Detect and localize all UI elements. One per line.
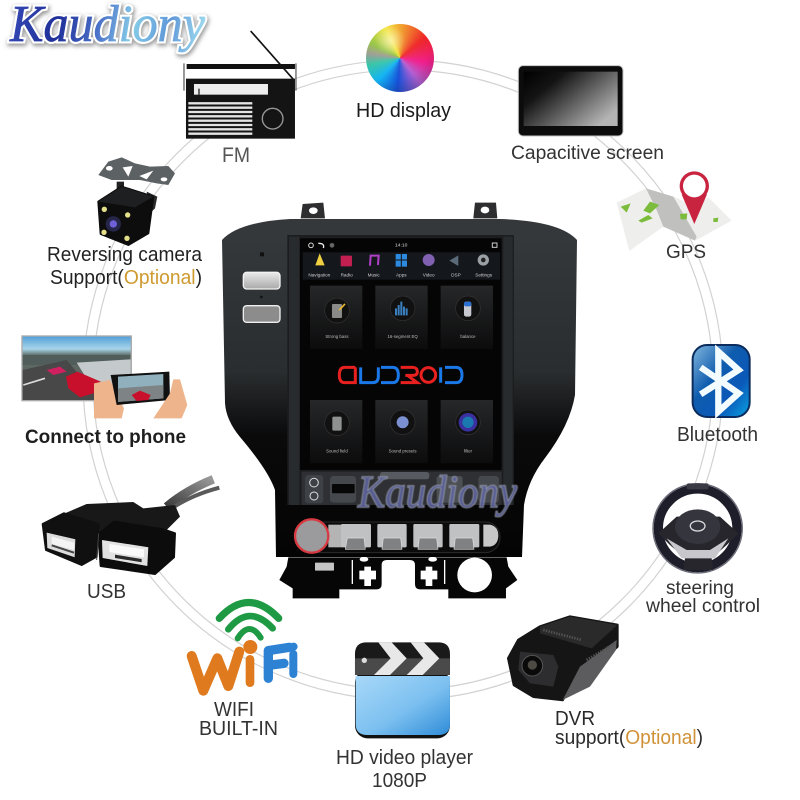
icon: GPS map and pin — [617, 171, 732, 251]
icon: connect to phone — [22, 336, 187, 418]
label: steering wheel control: steering — [666, 578, 734, 599]
app labels: Apps — [396, 272, 407, 277]
icon: reversing camera — [98, 157, 175, 245]
air vent buttons — [243, 252, 280, 322]
button strip with hazard button — [295, 519, 500, 553]
mounting tabs — [301, 203, 497, 218]
screen and controls — [243, 235, 514, 505]
label: DVR support(Optional): DVR — [555, 708, 595, 730]
device body — [222, 219, 577, 557]
label: Capacitive screen: Capacitive screen — [511, 143, 664, 164]
app labels: Settings — [475, 272, 493, 277]
cards bottom: Sound field — [326, 449, 348, 454]
status bar — [309, 242, 497, 248]
cards top: 16-segment EQ — [387, 334, 418, 339]
icon: WiFi logo — [192, 602, 298, 691]
ANDROID wordmark — [339, 367, 462, 383]
cards bottom — [310, 400, 493, 463]
label: HD video player 1080P: HD video player — [336, 747, 473, 769]
app labels: Radio — [341, 272, 353, 277]
cards top: Strong bass — [325, 334, 349, 339]
icon: FM radio — [184, 31, 296, 139]
label: DVR support(Optional) — [555, 708, 703, 749]
cards top — [310, 286, 493, 349]
lower climate panel — [302, 472, 502, 505]
label: GPS: GPS — [666, 242, 706, 263]
icon: USB cable — [43, 479, 219, 574]
label: HD display: HD display — [356, 100, 451, 122]
label: Bluetooth: Bluetooth — [677, 424, 758, 446]
lower mounting bracket — [279, 557, 517, 598]
watermark: Kaudiony: Kaudiony — [357, 466, 518, 517]
app labels — [308, 272, 493, 277]
app labels: Navigation — [308, 272, 331, 277]
label: steering wheel control — [645, 578, 760, 617]
cards top: balance — [460, 334, 476, 339]
label: USB: USB — [87, 581, 126, 603]
icon: Bluetooth — [692, 344, 751, 418]
icon: HD display colour wheel — [366, 24, 434, 92]
label: Connect to phone: Connect to phone — [25, 427, 186, 448]
app labels: Video — [423, 272, 435, 277]
app icon row — [315, 253, 489, 267]
label: WIFI BUILT-IN — [199, 699, 278, 740]
label: Reversing camera Support(Optional) — [47, 244, 203, 289]
panel: car head unit — [222, 203, 577, 598]
label: Reversing camera Support(Optional): Support(Optional) — [50, 267, 202, 289]
label: HD video player 1080P — [336, 747, 473, 792]
icon: capacitive screen — [518, 66, 623, 136]
label: WIFI BUILT-IN: BUILT-IN — [199, 718, 278, 740]
icon: HD video player — [355, 642, 450, 738]
app labels: DSP — [451, 272, 461, 277]
cards bottom: filter — [464, 449, 473, 454]
label: DVR support(Optional): support(Optional) — [555, 727, 703, 749]
icon: steering wheel — [653, 483, 742, 573]
icon: DVR camera — [508, 617, 617, 700]
label: steering wheel control: wheel control — [645, 596, 760, 617]
cards bottom: Sound presets — [389, 449, 417, 454]
label: WIFI BUILT-IN: WIFI — [214, 699, 254, 721]
status bar: 14:10 — [395, 242, 408, 248]
label: FM: FM — [222, 144, 250, 167]
decorative ring — [83, 60, 723, 700]
app labels: Music — [368, 272, 380, 277]
label: HD video player 1080P: 1080P — [372, 770, 427, 792]
label: Reversing camera Support(Optional): Reversing camera — [47, 244, 203, 266]
